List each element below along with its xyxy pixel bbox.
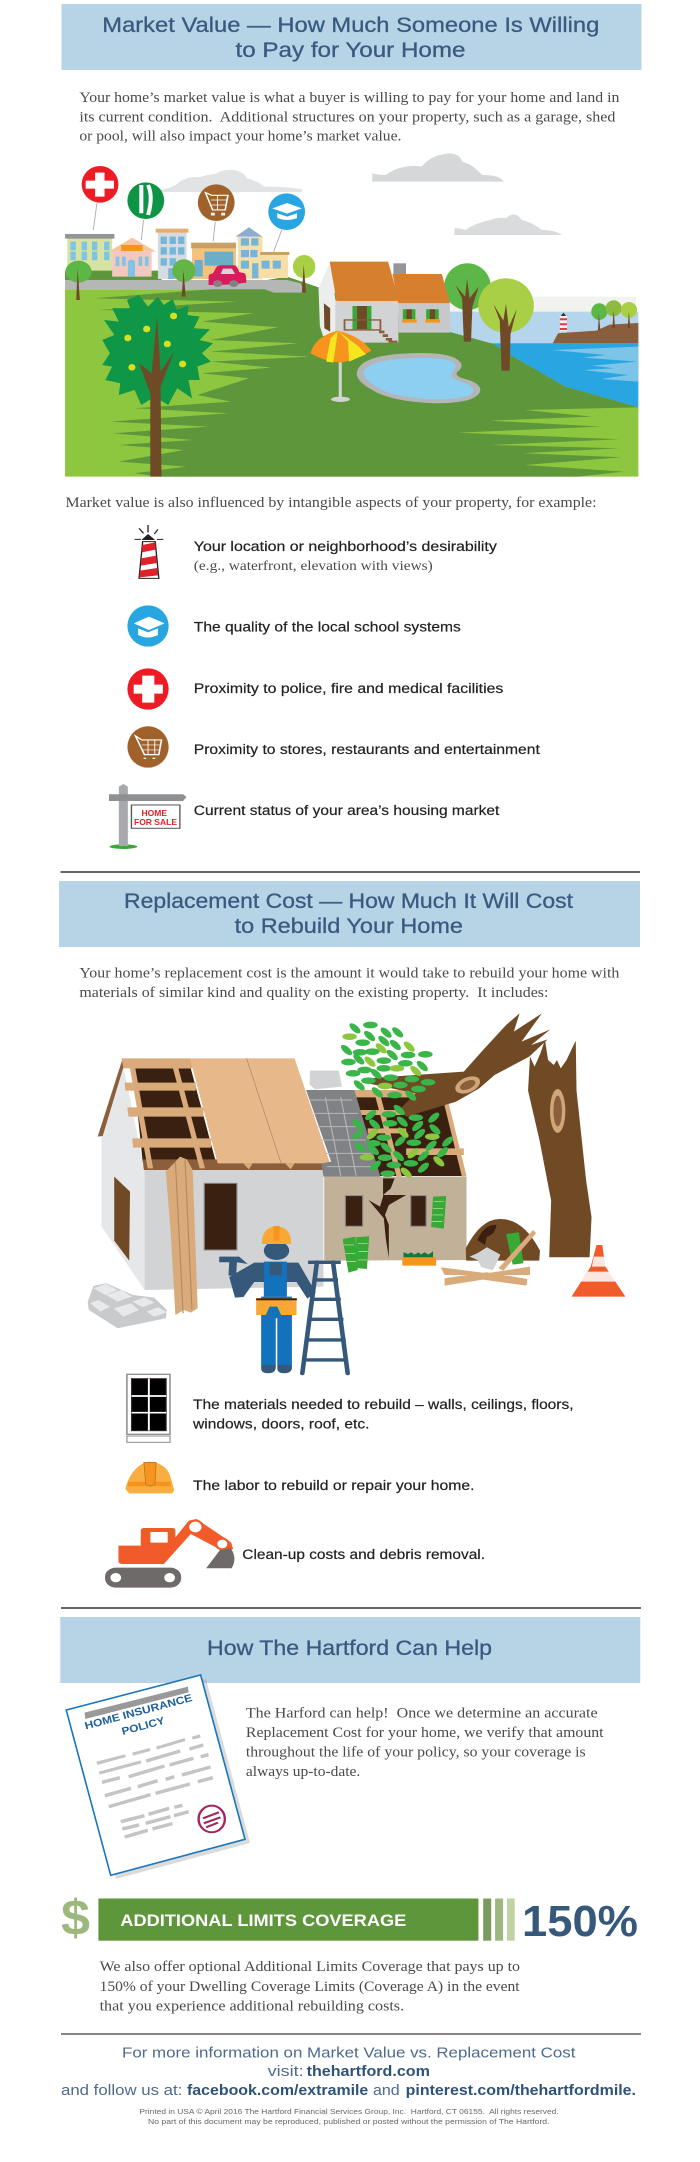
street — [65, 280, 305, 293]
text block: additional limits coverage — [100, 1959, 520, 2014]
text block: replacement cost intro — [79, 966, 620, 1001]
balloon icons — [82, 166, 305, 252]
text block: how the hartford can help — [246, 1706, 604, 1780]
text: housing market: Current status of your area’s housing market — [194, 803, 500, 818]
footer: more information links: and follow us at: — [61, 2083, 182, 2099]
worker with ladder — [219, 1226, 348, 1373]
heading: market value: to Pay for Your Home — [236, 39, 466, 62]
text: materials — [192, 1397, 574, 1432]
footer: more information links: facebook.com/extramile — [187, 2083, 368, 2099]
illustration: home insurance policy document — [66, 1675, 250, 1879]
umbrella — [310, 331, 371, 402]
text: services: Proximity to police, fire and medical facilities — [194, 681, 504, 696]
fallen tree — [368, 1013, 592, 1257]
footer: more information links: visit: — [268, 2064, 304, 2080]
buildings — [65, 227, 289, 280]
text: location — [194, 539, 497, 574]
stripes — [483, 1898, 515, 1941]
car — [209, 265, 246, 287]
text: stores: Proximity to stores, restaurants and entertainment — [194, 742, 540, 757]
icon: hard hat — [126, 1462, 174, 1493]
icon: home for sale sign: FOR SALE — [134, 817, 177, 827]
icon: lighthouse — [135, 525, 163, 578]
house right section — [306, 1071, 467, 1273]
heading: how the hartford can help — [60, 1617, 640, 1683]
trees by the house — [444, 263, 534, 371]
house — [319, 262, 450, 343]
list: intangible aspects — [109, 525, 540, 849]
text: materials: windows, doors, roof, etc. — [192, 1416, 370, 1432]
pool — [357, 353, 480, 403]
footer: more information links: thehartford.com — [307, 2064, 430, 2080]
heading: replacement cost — [59, 881, 640, 947]
heading: how the hartford can help: How The Hartford Can Help — [207, 1637, 492, 1660]
text: clean-up: Clean-up costs and debris removal. — [242, 1547, 485, 1562]
ground — [65, 277, 638, 477]
heading: replacement cost: to Rebuild Your Home — [235, 915, 463, 938]
text: labor: The labor to rebuild or repair your home. — [193, 1478, 474, 1493]
green bar with label — [98, 1898, 478, 1941]
icon: shopping cart — [127, 726, 169, 768]
clouds — [159, 153, 562, 235]
footer: more information links: and — [373, 2083, 400, 2099]
icon: window — [127, 1374, 170, 1442]
illustration: home insurance policy document: POLICY — [120, 1715, 166, 1738]
water and sky horizon — [442, 297, 638, 412]
illustration: home insurance policy document: HOME INSURANCE — [83, 1692, 194, 1732]
heading: replacement cost: Replacement Cost — How Much It Will Cost — [124, 890, 573, 913]
illustration: neighborhood and home — [65, 153, 638, 477]
heading: market value: Market Value — How Much Someone Is Willing — [102, 14, 599, 37]
list: replacement cost items — [105, 1374, 574, 1588]
debris pile — [441, 1219, 540, 1286]
text block: additional limits coverage: We also offer optional Additional Limits Coverage that pays up to — [100, 1959, 520, 1975]
text block: replacement cost intro: Your home’s replacement cost is the amount it would take to rebuild your home with — [79, 966, 620, 982]
icon: medical cross — [127, 668, 169, 710]
text: location: Your location or neighborhood’s desirability — [194, 539, 497, 554]
text block: how the hartford can help: always up-to-date. — [246, 1764, 360, 1780]
footer: legal text: Printed in USA © April 2016 The Hartford Financial Services Group, Inc. Hartford, CT 06155. All rights reserved. — [139, 2107, 559, 2116]
leaning lumber — [166, 1157, 198, 1315]
house left section — [98, 1058, 330, 1290]
footer: legal text — [139, 2107, 559, 2126]
text block: market value intro — [79, 90, 620, 145]
150 percent figure: 150% — [522, 1897, 638, 1946]
text block: intangible aspects lead-in: Market value is also influenced by intangible aspects of your property, for example: — [66, 495, 596, 511]
illustration: damaged home being rebuilt — [88, 1013, 625, 1373]
text block: how the hartford can help: throughout the life of your policy, so your coverage is — [246, 1744, 586, 1760]
text block: how the hartford can help: The Harford can help! Once we determine an accurate — [246, 1706, 598, 1722]
footer: more information links — [61, 2046, 636, 2099]
icon: graduation cap — [127, 605, 169, 647]
text block: additional limits coverage: that you experience additional rebuilding costs. — [100, 1998, 404, 2014]
footer: more information links: For more information on Market Value vs. Replacement Cost — [122, 2046, 575, 2062]
heading: market value — [62, 4, 642, 70]
text block: additional limits coverage: 150% of your Dwelling Coverage Limits (Coverage A) in the event — [100, 1979, 520, 1995]
large fruit tree — [102, 295, 213, 477]
text block: market value intro: its current condition. Additional structures on your property, such as a garage, shed — [79, 109, 616, 125]
text: location: (e.g., waterfront, elevation with views) — [194, 559, 433, 574]
text block: market value intro: Your home’s market value is what a buyer is willing to pay for your home and land in — [79, 90, 620, 106]
text block: replacement cost intro: materials of similar kind and quality on the existing property. It includes: — [79, 985, 548, 1001]
text block: market value intro: or pool, will also impact your home’s market value. — [79, 129, 401, 145]
green bar with label: ADDITIONAL LIMITS COVERAGE — [120, 1912, 406, 1930]
icon: home for sale sign — [109, 784, 187, 849]
text: materials: The materials needed to rebuild – walls, ceilings, floors, — [193, 1397, 574, 1412]
text block: how the hartford can help: Replacement Cost for your home, we verify that amount — [246, 1725, 604, 1741]
text: schools: The quality of the local school systems — [194, 620, 461, 634]
bricks — [88, 1283, 167, 1328]
footer: legal text: No part of this document may be reproduced, published or posted without the permission of The Hartford. — [148, 2117, 550, 2126]
icon: excavator — [105, 1519, 234, 1588]
icon: dollar sign: $ — [61, 1890, 90, 1946]
traffic cone — [572, 1245, 625, 1297]
banner: additional limits coverage — [61, 1890, 638, 1946]
footer: more information links: pinterest.com/thehartfordmile. — [406, 2083, 636, 2099]
icon: home for sale sign: HOME — [142, 808, 167, 818]
leaves — [339, 1022, 455, 1179]
small street trees — [65, 255, 315, 300]
lighthouse island — [553, 300, 638, 343]
